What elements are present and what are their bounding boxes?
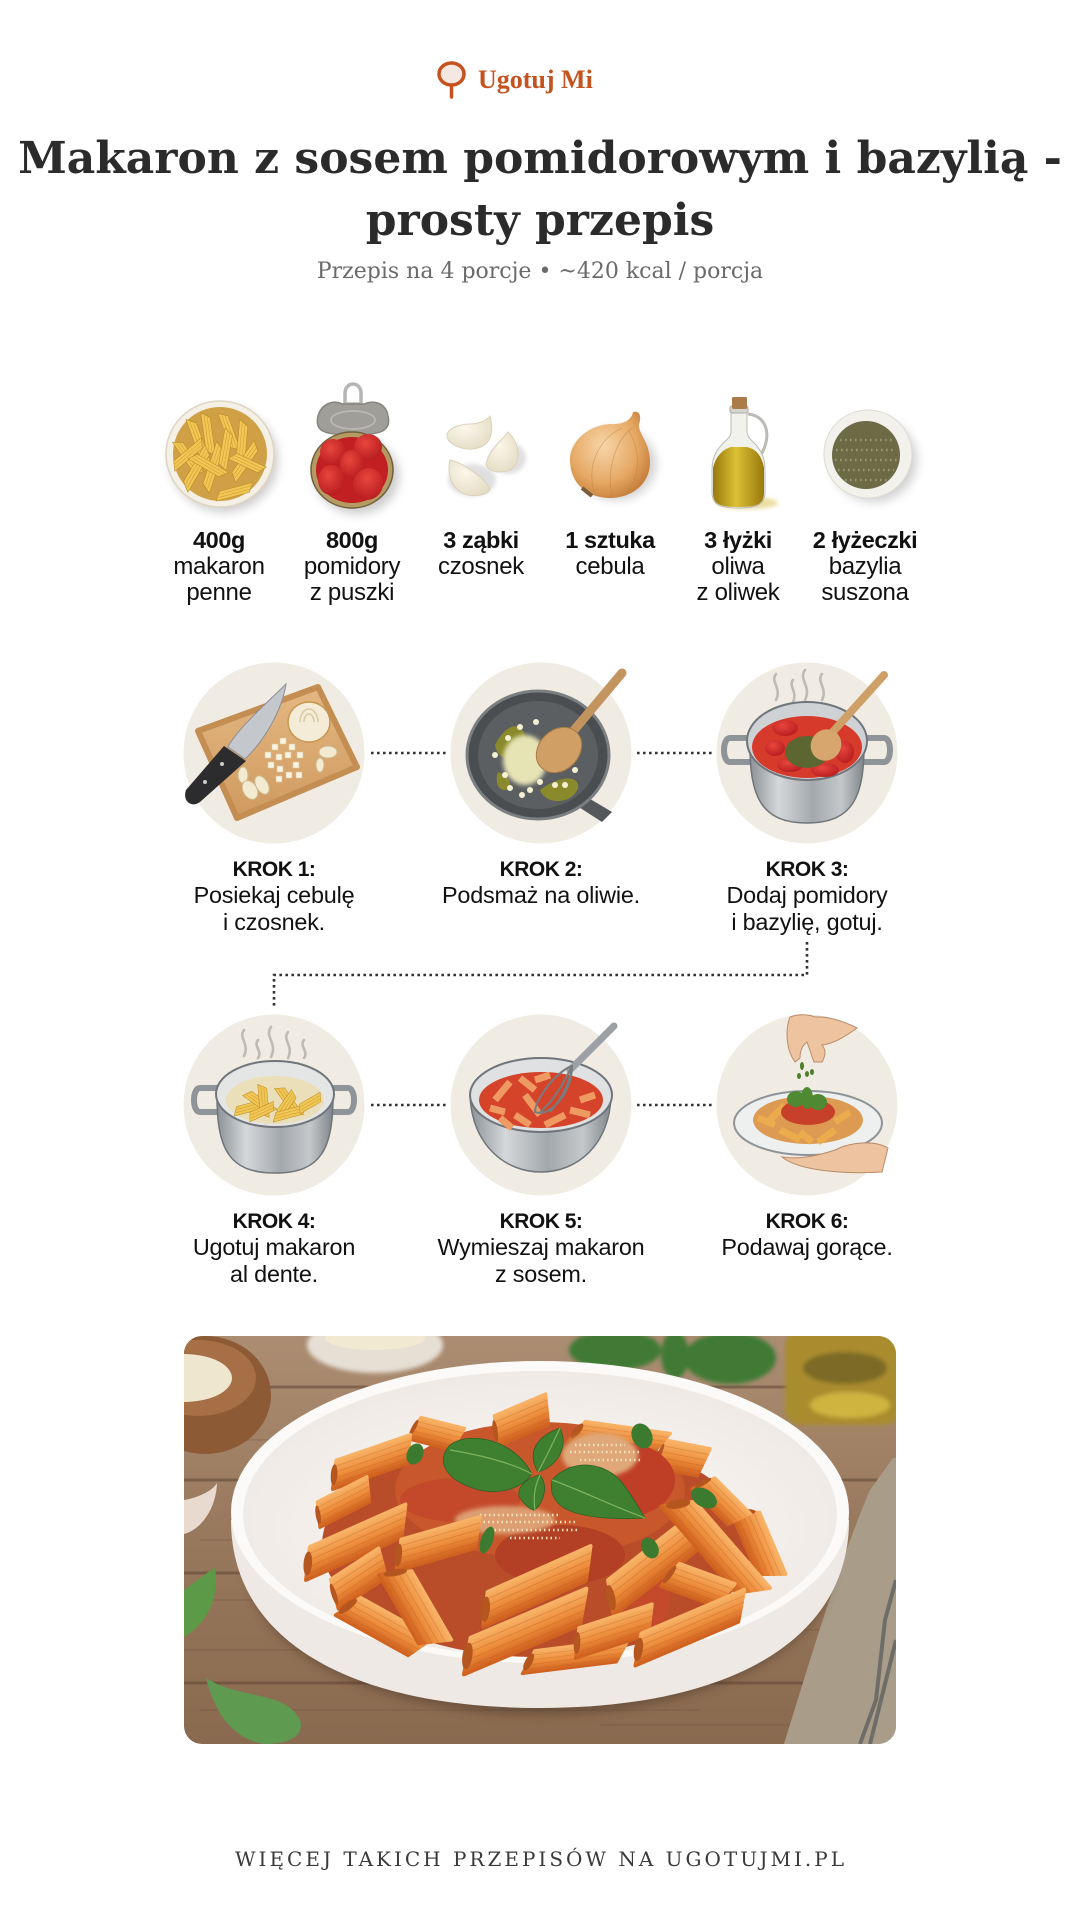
step 3 xyxy=(716,662,898,935)
ingredient: canned tomatoes xyxy=(304,384,400,606)
ingredient: penne: 400g xyxy=(193,527,245,553)
step 4: Ugotuj makaron xyxy=(193,1234,355,1260)
basil leaf bottom xyxy=(206,1678,301,1744)
connector: steps 2 to 3 xyxy=(637,752,712,754)
ingredient: dried basil: bazylia xyxy=(829,553,902,580)
white bowl xyxy=(231,1361,849,1715)
step 5: z sosem. xyxy=(495,1261,587,1287)
icon: serving plate with hands xyxy=(716,1014,898,1196)
parmesan xyxy=(455,1433,640,1538)
ingredient: dried basil xyxy=(813,410,917,606)
step 4 xyxy=(184,1014,364,1287)
logo xyxy=(439,63,593,97)
footer: WIĘCEJ TAKICH PRZEPISÓW NA UGOTUJMI.PL xyxy=(235,1846,847,1871)
connector: steps 3 to 4 xyxy=(274,942,807,1008)
panel: ingredients xyxy=(166,384,917,606)
subtitle: Przepis na 4 porcje • ~420 kcal / porcja xyxy=(317,259,763,284)
pasta xyxy=(293,1394,786,1675)
ingredient: olive oil: z oliwek xyxy=(697,579,781,606)
ingredient: olive oil: 3 łyżki xyxy=(704,527,772,553)
ingredient: penne: penne xyxy=(186,579,252,606)
back penne xyxy=(308,1394,786,1585)
step 1: Posiekaj cebulę xyxy=(194,882,354,908)
garlic clove xyxy=(184,1483,217,1534)
icon: frying pan xyxy=(450,662,632,844)
front penne xyxy=(293,1487,770,1675)
brand name: Ugotuj Mi xyxy=(478,65,593,94)
ingredient: penne xyxy=(166,401,278,606)
step 3: i bazylię, gotuj. xyxy=(731,909,883,935)
step 6 label: KROK 6: xyxy=(766,1210,848,1233)
step 1 label: KROK 1: xyxy=(233,858,315,881)
icon: spoon logo xyxy=(439,63,464,97)
ingredient: canned tomatoes: pomidory xyxy=(304,553,400,580)
napkin xyxy=(784,1458,896,1744)
connector: steps 1 to 2 xyxy=(371,752,446,754)
icon: pasta pot xyxy=(184,1014,364,1196)
ingredient: canned tomatoes: z puszki xyxy=(310,579,394,606)
basil leaf left xyxy=(184,1568,216,1637)
step 2 label: KROK 2: xyxy=(500,858,582,881)
connector: steps 4 to 5 xyxy=(371,1104,446,1106)
step 1: i czosnek. xyxy=(223,909,325,935)
step 6: Podawaj gorące. xyxy=(721,1234,893,1260)
step 5: Wymieszaj makaron xyxy=(438,1234,644,1260)
step 2: Podsmaż na oliwie. xyxy=(442,882,640,908)
step 6 xyxy=(716,1014,898,1260)
step 4 label: KROK 4: xyxy=(233,1210,315,1233)
icon: cutting board xyxy=(184,662,364,844)
step 3 label: KROK 3: xyxy=(766,858,848,881)
ingredient: onion: 1 sztuka xyxy=(565,527,656,553)
cutlery xyxy=(860,1580,896,1744)
step 5 label: KROK 5: xyxy=(500,1210,582,1233)
step 4: al dente. xyxy=(230,1261,318,1287)
ingredient: canned tomatoes: 800g xyxy=(326,527,378,553)
step 2 xyxy=(442,662,640,908)
ingredient: dried basil: suszona xyxy=(821,579,910,606)
title: prosty przepis xyxy=(366,195,714,246)
herb specks xyxy=(403,1420,721,1562)
step 5 xyxy=(438,1014,644,1287)
icon: tomato pot xyxy=(716,662,898,844)
ingredient: penne: makaron xyxy=(173,553,265,580)
basil background xyxy=(569,1330,776,1384)
icon: mixing bowl xyxy=(450,1014,632,1196)
step 3: Dodaj pomidory xyxy=(726,882,888,908)
connector: steps 5 to 6 xyxy=(637,1104,712,1106)
ingredient: onion xyxy=(565,412,656,580)
photo: finished pasta dish xyxy=(184,1336,896,1744)
ingredient: dried basil: 2 łyżeczki xyxy=(813,527,917,553)
ingredient: olive oil: oliwa xyxy=(711,553,766,580)
oil glass xyxy=(785,1330,900,1425)
ingredient: onion: cebula xyxy=(576,553,645,580)
wooden bowl xyxy=(184,1336,271,1454)
ingredient: olive oil xyxy=(697,397,781,606)
small white bowl xyxy=(304,1336,446,1376)
ingredient: garlic xyxy=(438,416,526,580)
title: Makaron z sosem pomidorowym i bazylią - xyxy=(18,133,1062,184)
step 1 xyxy=(184,662,364,935)
basil leaves xyxy=(443,1428,645,1519)
ingredient: garlic: 3 ząbki xyxy=(443,527,519,553)
ingredient: garlic: czosnek xyxy=(438,553,525,580)
